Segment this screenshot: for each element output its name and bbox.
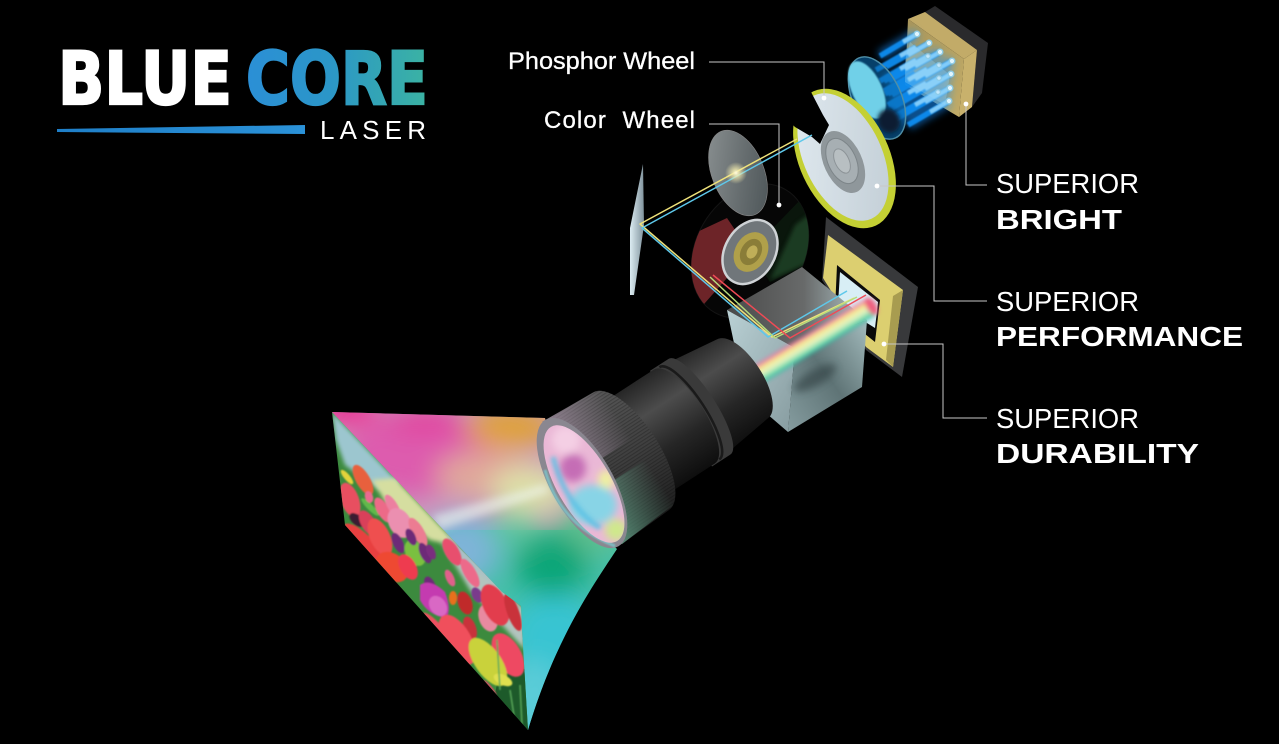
incoming blue ray (642, 135, 847, 337)
logo: Blue Core Laser (57, 37, 428, 145)
feature: Superior Durability: DURABILITY (996, 438, 1199, 469)
lens rim lower cyan tint (545, 470, 615, 546)
lens glass colours (544, 425, 624, 543)
projected screen image (332, 412, 528, 730)
leader line: Color Wheel (709, 124, 781, 207)
feature: Superior Bright: BRIGHT (996, 204, 1122, 235)
grip mauve glow (542, 386, 632, 475)
feature: Superior Bright: SUPERIOR (996, 168, 1139, 199)
feature: Superior Performance: PERFORMANCE (996, 321, 1243, 352)
wheel rim (772, 72, 917, 245)
lens outer rim (519, 404, 645, 562)
condenser lens (697, 122, 779, 224)
DMD chip (822, 217, 918, 377)
rear barrel (661, 322, 789, 458)
label: Phosphor Wheel: Phosphor Wheel (508, 48, 695, 75)
color wheel hub (711, 210, 789, 294)
grip ring (542, 375, 694, 544)
incoming yellow ray (640, 139, 854, 337)
folding mirror (630, 164, 644, 295)
collimator lens (837, 48, 917, 148)
chip window (835, 265, 880, 342)
pale light wash over emitters (905, 42, 950, 105)
rainbow output beam (752, 295, 881, 384)
LED emitters (914, 31, 955, 104)
ray glow (880, 34, 952, 125)
logo word: CORE: CORE (246, 37, 428, 122)
lens barrel stack (542, 307, 799, 544)
red ray (713, 275, 866, 338)
laser housing right face (959, 50, 977, 117)
laser housing top face (908, 12, 977, 59)
label: Color Wheel: Color Wheel (544, 107, 695, 134)
prism top (727, 267, 867, 348)
logo underline bar (57, 125, 305, 134)
logo word: BLUE: BLUE (58, 37, 232, 122)
cone colour field (332, 412, 617, 730)
laser rays (876, 34, 952, 125)
grip green glow (590, 460, 677, 544)
projection cone (332, 412, 617, 730)
color wheel (691, 184, 809, 318)
wheel black notch (791, 90, 829, 144)
chip dark frame (822, 217, 918, 377)
logo word: LASER: LASER (320, 115, 426, 145)
prism front (727, 310, 795, 432)
lens flare (725, 162, 747, 184)
prism side (788, 320, 867, 432)
color wheel segments (691, 202, 809, 304)
projection lens (536, 338, 773, 548)
cone white light streak (432, 484, 550, 530)
leader line: Phosphor Wheel (709, 62, 826, 100)
color wheel disc (668, 163, 832, 339)
wheel hub (812, 124, 874, 200)
green ray (710, 277, 857, 338)
laser housing back (925, 6, 988, 107)
feature: Superior Performance: SUPERIOR (996, 286, 1139, 317)
wheel disc (779, 79, 907, 235)
prism cube (727, 267, 867, 432)
feature: Superior Bright (996, 168, 1139, 235)
leader line: Superior Durability (882, 342, 987, 418)
feature: Superior Durability: SUPERIOR (996, 403, 1139, 434)
laser module (837, 6, 988, 148)
middle barrel (598, 359, 732, 500)
feature: Superior Durability (996, 403, 1199, 469)
optical light rays (640, 135, 866, 338)
chip yellow frame (823, 235, 903, 367)
feature: Superior Performance (996, 286, 1243, 352)
laser housing LED face (905, 19, 964, 117)
phosphor wheel (772, 72, 917, 245)
leader line: Superior Performance (875, 184, 987, 301)
groove ring (650, 350, 744, 467)
leader line: Superior Bright (964, 102, 987, 185)
